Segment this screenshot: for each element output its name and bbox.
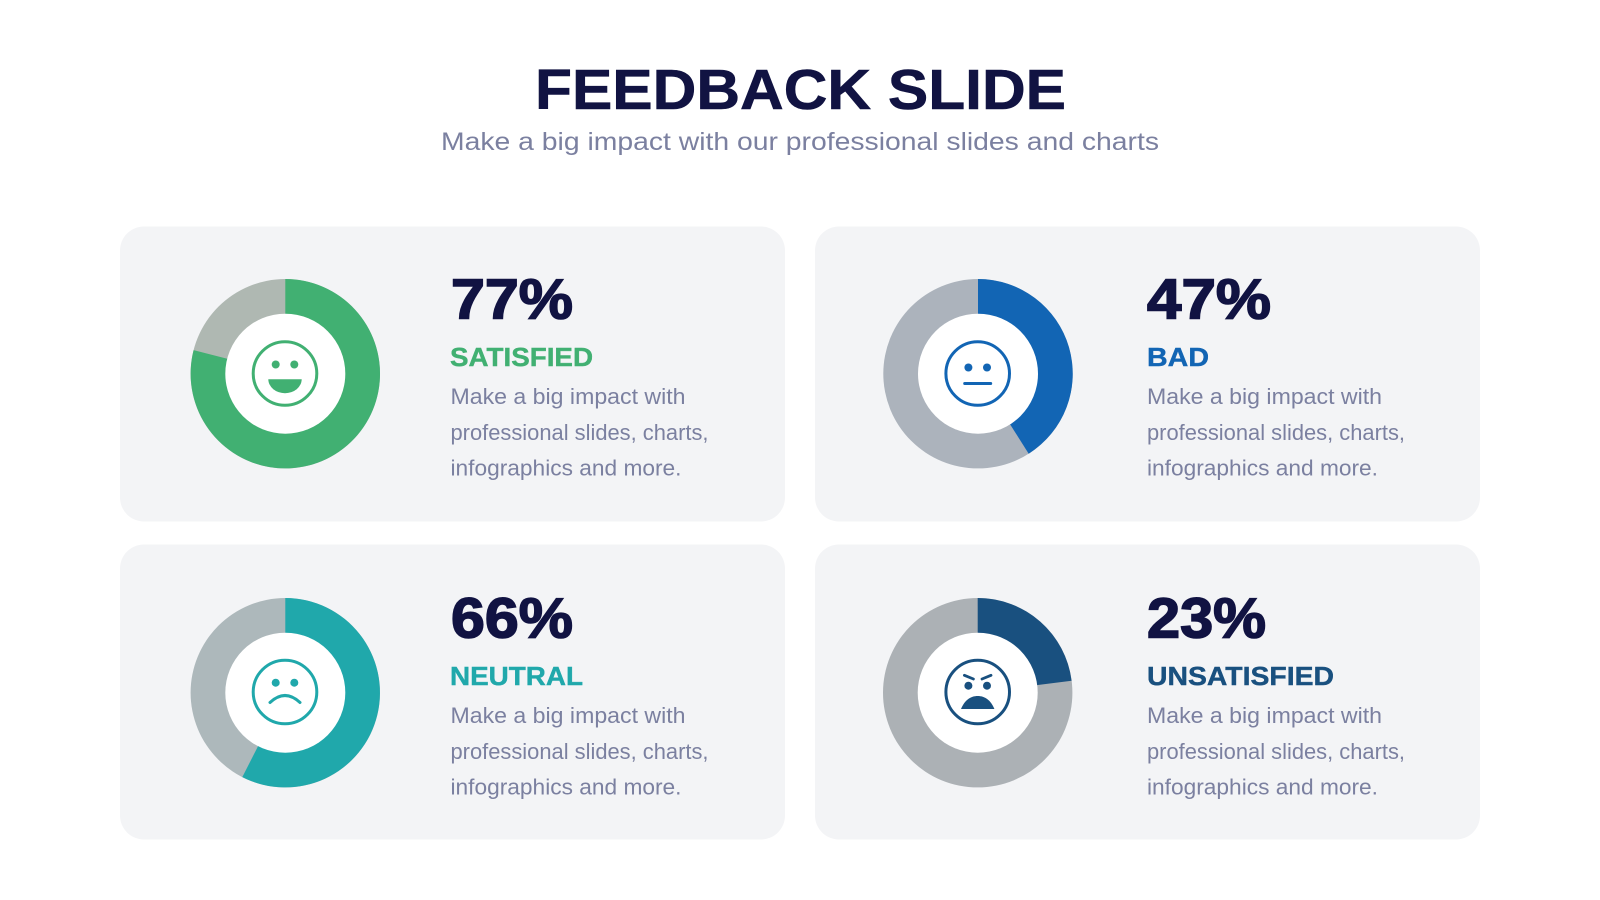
panel: satisfied: [120, 226, 785, 522]
description: infographics and more.: [450, 456, 682, 480]
donut chart: 23%: [883, 598, 1072, 787]
panel: unsatisfied: [815, 544, 1480, 840]
panel: bad: [815, 226, 1480, 522]
donut chart: 77%: [191, 279, 380, 468]
panel: neutral: [120, 544, 785, 840]
icon: angry face: [946, 660, 1010, 724]
description: infographics and more.: [450, 774, 682, 800]
description: Make a big impact with: [1147, 703, 1382, 728]
donut chart: 47%: [883, 279, 1073, 468]
donut chart: 66%: [191, 598, 380, 787]
label: UNSATISFIED: [1147, 661, 1334, 691]
description: professional slides, charts,: [450, 739, 708, 764]
icon: neutral face: [946, 342, 1010, 405]
percentage: 66%: [451, 586, 573, 650]
description: professional slides, charts,: [1147, 420, 1405, 445]
description: Make a big impact with: [1147, 384, 1382, 409]
description: professional slides, charts,: [450, 420, 708, 445]
percentage: 47%: [1147, 268, 1271, 332]
label: NEUTRAL: [450, 661, 583, 691]
icon: happy face: [253, 342, 317, 405]
subtitle: Make a big impact with our professional slides and charts: [441, 128, 1159, 156]
description: infographics and more.: [1147, 774, 1378, 800]
description: professional slides, charts,: [1147, 739, 1405, 764]
label: BAD: [1147, 342, 1209, 372]
description: Make a big impact with: [450, 703, 686, 728]
description: infographics and more.: [1147, 456, 1378, 480]
icon: sad face: [253, 660, 317, 724]
percentage: 23%: [1147, 586, 1266, 650]
description: Make a big impact with: [450, 384, 686, 409]
percentage: 77%: [451, 268, 573, 332]
title: FEEDBACK SLIDE: [535, 58, 1066, 122]
label: SATISFIED: [450, 342, 593, 372]
